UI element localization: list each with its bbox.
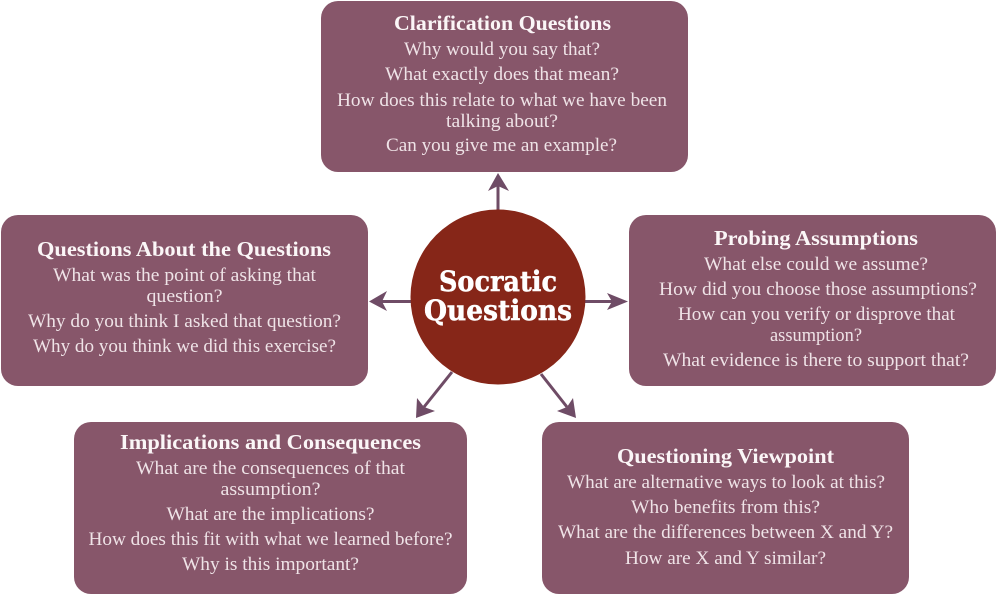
- text: questions about the questions list: [28, 265, 341, 357]
- heading: implications and consequences: Implications and Consequences: [120, 430, 421, 454]
- text: clarification list: Why would you say that?: [404, 39, 600, 60]
- text: questioning viewpoint list: How are X and Y similar?: [625, 548, 826, 569]
- text: questions about the questions list: question?: [146, 286, 222, 307]
- text: probing assumptions list: [659, 254, 977, 371]
- text: clarification list: [337, 39, 667, 156]
- text: implications list: How does this fit with what we learned before?: [88, 529, 452, 550]
- text: questions about the questions list: Why do you think we did this exercise?: [33, 336, 336, 357]
- text: implications list: assumption?: [220, 479, 320, 500]
- text: probing assumptions list: How can you verify or disprove that: [678, 304, 956, 325]
- panel: questions about the questions: [1, 215, 368, 386]
- text: questions about the questions list: Why do you think I asked that question?: [28, 311, 341, 332]
- text: questions about the questions list: What was the point of asking that: [53, 265, 317, 286]
- text: clarification list: talking about?: [446, 111, 558, 132]
- text: implications list: Why is this important?: [182, 554, 359, 575]
- text: questioning viewpoint list: What are alternative ways to look at this?: [567, 472, 885, 493]
- text: clarification list: How does this relate to what we have been: [337, 90, 667, 111]
- arrow: left to questions about the questions: [369, 291, 412, 311]
- panel: clarification questions: [321, 1, 688, 172]
- text: implications list: [88, 458, 452, 575]
- panel: implications and consequences: [74, 422, 467, 594]
- text: probing assumptions list: How did you choose those assumptions?: [659, 279, 977, 300]
- center circle: Socratic Questions: Socratic: [439, 265, 557, 298]
- heading: questioning viewpoint: Questioning Viewpoint: [617, 444, 834, 468]
- arrow: down-left to implications and consequences: [416, 372, 452, 418]
- text: implications list: What are the consequences of that: [136, 458, 406, 479]
- arrow: up to clarification questions: [488, 173, 509, 212]
- heading: questions about the questions: Questions About the Questions: [37, 237, 331, 261]
- center circle: Socratic Questions: [410, 210, 586, 384]
- text: probing assumptions list: What evidence is there to support that?: [663, 350, 969, 371]
- center circle: Socratic Questions: Questions: [424, 294, 572, 327]
- text: probing assumptions list: assumption?: [770, 325, 862, 346]
- panel: probing assumptions: [629, 215, 996, 386]
- heading: clarification questions: Clarification Questions: [394, 11, 611, 35]
- text: clarification list: What exactly does that mean?: [385, 64, 619, 85]
- text: questioning viewpoint list: Who benefits from this?: [631, 497, 820, 518]
- panel: questioning viewpoint: [542, 422, 909, 594]
- text: questioning viewpoint list: [558, 472, 893, 569]
- text: probing assumptions list: What else could we assume?: [704, 254, 928, 275]
- heading: probing assumptions: Probing Assumptions: [714, 226, 918, 250]
- text: clarification list: Can you give me an example?: [386, 135, 617, 156]
- arrow: right to probing assumptions: [585, 293, 628, 310]
- text: implications list: What are the implications?: [166, 504, 374, 525]
- arrow: down-right to questioning viewpoint: [541, 374, 576, 418]
- text: questioning viewpoint list: What are the differences between X and Y?: [558, 522, 893, 543]
